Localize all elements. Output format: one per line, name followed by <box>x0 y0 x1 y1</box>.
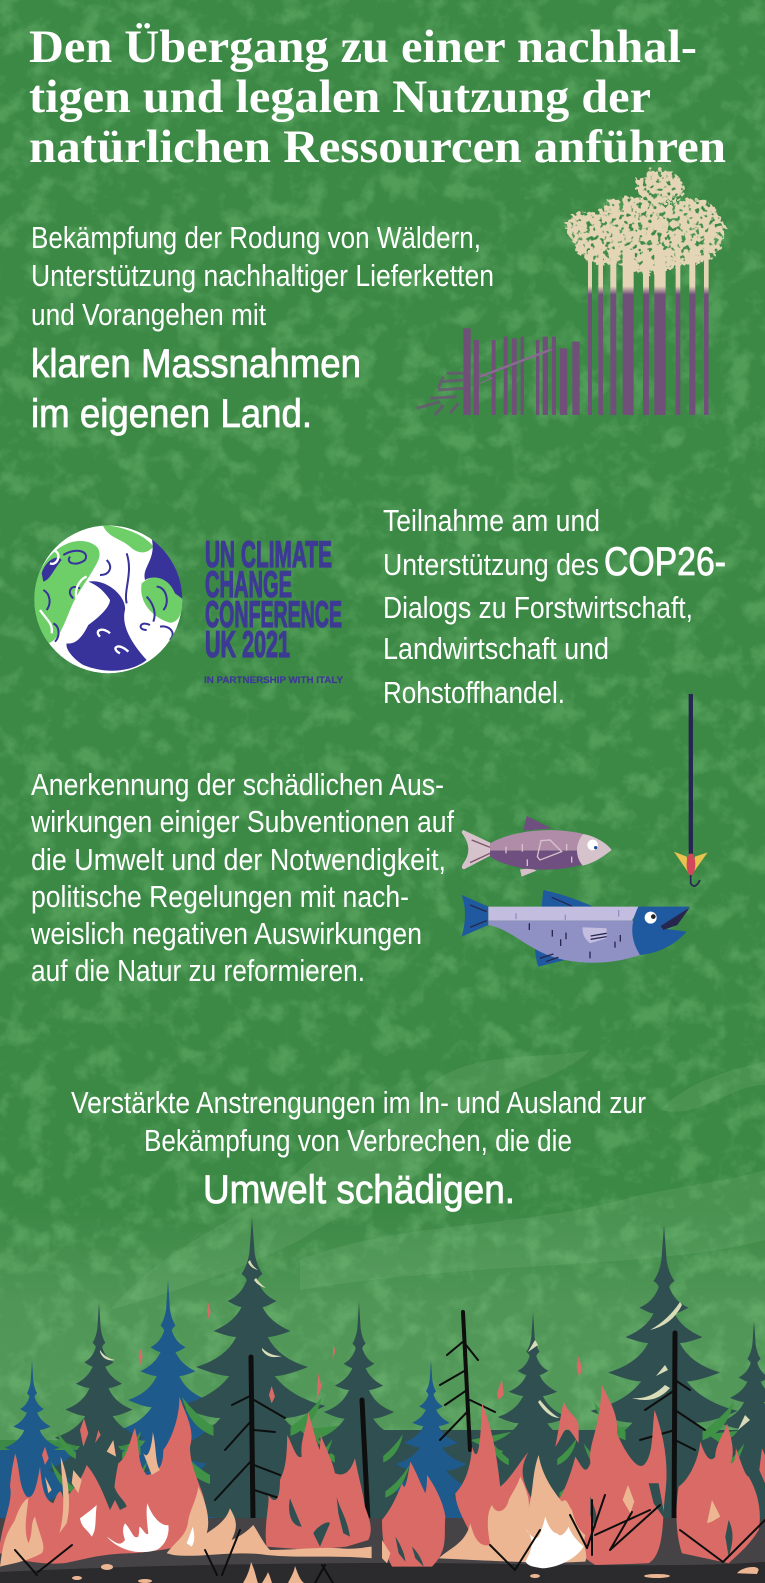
text block: environmental crime: Umwelt schädigen. <box>203 1168 515 1212</box>
title: natürlichen Ressourcen anführen <box>29 121 726 173</box>
text block: environmental crime: Verstärkte Anstrengungen im In- und Ausland zur <box>71 1085 646 1120</box>
white flames <box>80 1503 194 1552</box>
text block: subsidies <box>30 767 454 988</box>
text block: subsidies: weislich negativen Auswirkungen <box>30 916 422 951</box>
flames left <box>0 1303 372 1567</box>
text block: COP26 <box>383 503 726 710</box>
canopy <box>567 170 725 273</box>
text block: COP26: Rohstoffhandel. <box>383 675 565 710</box>
blue oceans <box>42 538 184 671</box>
text block: forests: und Vorangehen mit <box>31 297 266 332</box>
ground twigs <box>15 1495 765 1583</box>
flames right <box>382 1356 765 1574</box>
title: tigen und legalen Nutzung der <box>29 71 651 123</box>
peach flames <box>0 1498 43 1567</box>
title <box>29 21 726 173</box>
salmon flames <box>382 1462 445 1567</box>
text block: subsidies: wirkungen einiger Subventionen auf <box>30 804 454 839</box>
logo: UN Climate Change Conference text: UN CLIMATE <box>205 534 332 575</box>
logo: UN Climate Change Conference text: UK 2021 <box>205 624 290 665</box>
text block: forests: Bekämpfung der Rodung von Wäldern, <box>31 220 481 255</box>
logo: UN Climate Change Conference text: CONFERENCE <box>205 594 342 635</box>
text block: COP26: Dialogs zu Forstwirtschaft, <box>383 590 693 625</box>
dark trees <box>44 1217 765 1525</box>
dark understory <box>185 1430 765 1530</box>
text block: COP26: COP26- <box>604 540 726 584</box>
text block: COP26: Teilnahme am und <box>383 503 600 538</box>
logo: UN Climate Change Conference text: CHANGE <box>205 564 292 605</box>
text block: environmental crime <box>71 1085 646 1212</box>
fallen tree <box>480 349 552 383</box>
illustration: spruce forest <box>0 1217 765 1535</box>
bare trunks and branches <box>215 1312 705 1535</box>
text block: subsidies: auf die Natur zu reformieren. <box>31 953 365 988</box>
blue trees <box>0 1280 475 1535</box>
text block: forests: im eigenen Land. <box>31 392 312 436</box>
stumps <box>463 328 580 415</box>
ground <box>0 1518 765 1583</box>
illustration: fish and hook <box>462 694 708 967</box>
purple fish <box>462 816 612 877</box>
dark notches in flames <box>395 1483 732 1567</box>
text block: COP26: Unterstützung des <box>383 547 599 582</box>
text block: COP26: Landwirtschaft und <box>383 631 609 666</box>
logo: UN Climate Change Conference text <box>204 534 344 686</box>
text block: forests <box>31 220 494 436</box>
green landmasses <box>33 525 184 643</box>
dark notches in flames <box>109 1483 350 1547</box>
illustration: deforested trees <box>417 170 725 415</box>
fishing hook <box>674 694 708 886</box>
salmon flames <box>0 1397 206 1564</box>
text block: forests: Unterstützung nachhaltiger Lieferketten <box>31 258 494 293</box>
standing trunks <box>588 250 709 415</box>
text block: subsidies: die Umwelt und der Notwendigkeit, <box>31 842 446 877</box>
peach flames <box>439 1455 586 1563</box>
blue fish <box>462 890 690 967</box>
ground embers and small flames <box>72 1562 670 1583</box>
cream needle accents <box>100 1260 750 1430</box>
logo: UN Climate Change Conference text: IN PARTNERSHIP WITH ITALY <box>204 675 344 686</box>
white flame <box>525 1517 584 1568</box>
text block: subsidies: Anerkennung der schädlichen Aus- <box>31 767 444 802</box>
logo: COP26 earth <box>33 525 184 673</box>
title: Den Übergang zu einer nachhal- <box>29 21 697 73</box>
text block: forests: klaren Massnahmen <box>31 342 361 386</box>
text block: environmental crime: Bekämpfung von Verbrechen, die die <box>144 1123 572 1158</box>
text block: subsidies: politische Regelungen mit nach- <box>31 879 409 914</box>
